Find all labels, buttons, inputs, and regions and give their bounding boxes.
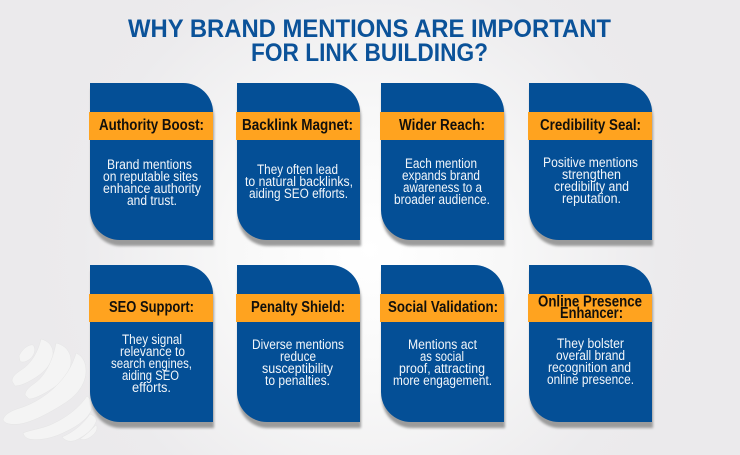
panel: Social Validation: Social Validation: [388, 299, 498, 316]
panel: Credibility Seal: Credibility Seal: [540, 117, 641, 134]
panel: Credibility Seal [528, 83, 653, 246]
panel: Penalty Shield: reduce [280, 349, 316, 364]
panel: Credibility Seal: reputation. [562, 191, 621, 206]
panel: Wider Reach: broader audience. [394, 192, 490, 207]
panel: Online Presence Enhancer: They bolster [557, 336, 624, 351]
panel: Social Validation: as social [420, 349, 464, 364]
panel: SEO Support: SEO Support: [109, 299, 194, 316]
panel: Online Presence Enhancer: Enhancer: [560, 305, 623, 322]
panel: Authority Boost: Authority Boost: [99, 117, 204, 134]
panel: Social Validation [380, 265, 505, 428]
panel: Online Presence Enhancer: overall brand [556, 348, 625, 363]
panel: Social Validation: proof, attracting [399, 361, 485, 376]
title: FOR LINK BUILDING? [251, 39, 488, 67]
panel: Backlink Magnet: Backlink Magnet: [242, 117, 353, 134]
panel: SEO Support: They signal [122, 332, 182, 347]
panel: Authority Boost: and trust. [127, 193, 177, 208]
panel: SEO Support: search engines, [111, 356, 192, 371]
panel: Penalty Shield: Penalty Shield: [251, 299, 345, 316]
panel: Social Validation: Mentions act [408, 337, 477, 352]
panel: Wider Reach: expands brand [402, 168, 480, 183]
panel: Social Validation: more engagement. [393, 373, 492, 388]
panel: Backlink Magnet: aiding SEO efforts. [249, 186, 348, 201]
panel: Wider Reach [380, 83, 505, 246]
panel: Online Presence Enhancer: online presence. [547, 372, 634, 387]
panel: Credibility Seal: Positive mentions [543, 155, 638, 170]
panel: Penalty Shield [236, 265, 361, 428]
panel: Authority Boost: enhance authority [103, 181, 201, 196]
panel: SEO Support: aiding SEO [122, 368, 179, 383]
icon: faint globe decoration [3, 339, 97, 441]
panel: SEO Support [89, 265, 214, 428]
panel: Online Presence Enhancer: Online Presence [538, 294, 642, 310]
panel: Online Presence Enhancer [528, 265, 653, 428]
panel: Penalty Shield: to penalties. [265, 373, 330, 388]
panel: Backlink Magnet: to natural backlinks, [245, 174, 353, 189]
panel: Backlink Magnet [236, 83, 361, 246]
panel: Authority Boost [89, 83, 214, 246]
panel: Backlink Magnet: They often lead [257, 162, 338, 177]
panel: Authority Boost: Brand mentions [107, 157, 192, 172]
panel: Wider Reach: Each mention [405, 156, 477, 171]
panel: Credibility Seal: credibility and [554, 179, 629, 194]
panel: SEO Support: relevance to [120, 344, 185, 359]
panel: Penalty Shield: Diverse mentions [252, 337, 344, 352]
panel: SEO Support: efforts. [132, 380, 171, 395]
title: WHY BRAND MENTIONS ARE IMPORTANT [128, 15, 611, 43]
title [128, 15, 611, 67]
panel: Authority Boost: on reputable sites [103, 169, 198, 184]
panel: Wider Reach: Wider Reach: [399, 117, 485, 134]
panel: Credibility Seal: strengthen [562, 167, 621, 182]
panel: Wider Reach: awareness to a [403, 180, 482, 195]
panel: Online Presence Enhancer: recognition and [548, 360, 631, 375]
panel: Penalty Shield: susceptibility [262, 361, 333, 376]
